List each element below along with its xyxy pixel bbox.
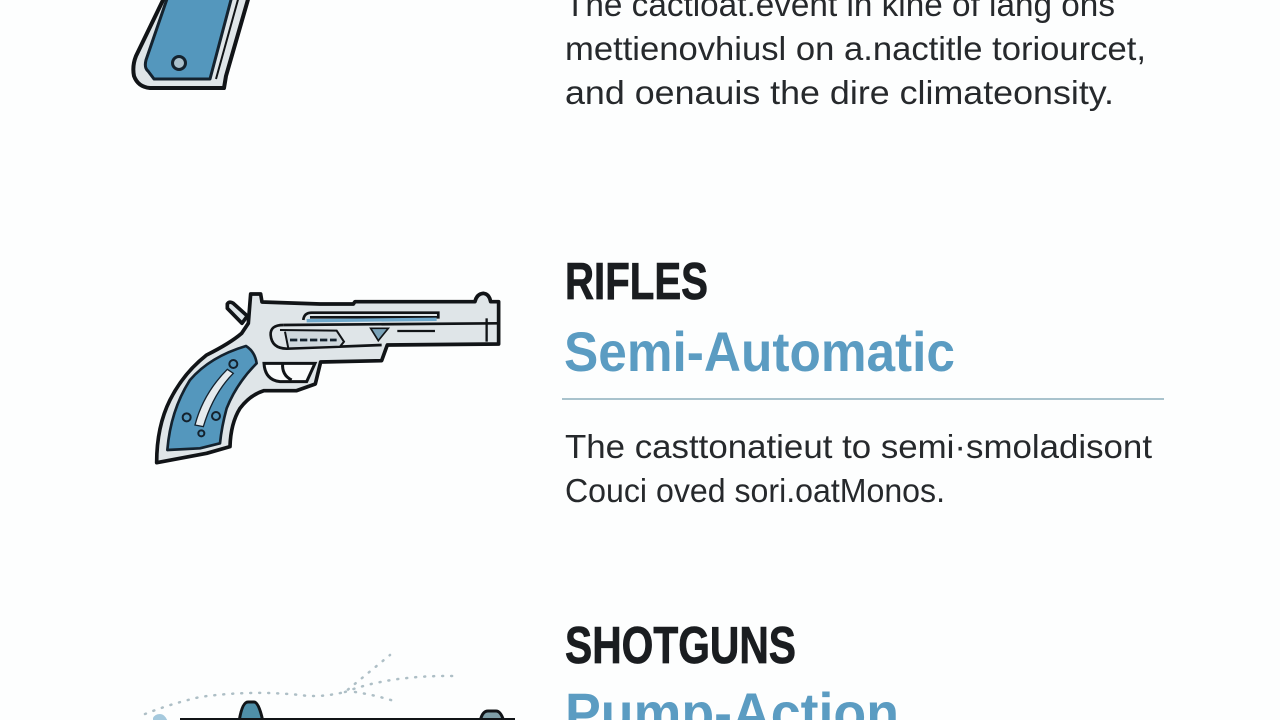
text block: rifles description: The casttonatieut to semi·smoladisont: [565, 428, 1152, 465]
heading: shotguns: SHOTGUNS: [565, 617, 796, 675]
icon: handgun grip: [133, 0, 249, 88]
heading: rifles: RIFLES: [565, 253, 708, 311]
text block: first description: mettienovhiusl on a.nactitle toriourcet,: [565, 30, 1146, 67]
text block: rifles description: [565, 428, 1152, 509]
text block: rifles description: Couci oved sori.oatMonos.: [565, 472, 945, 509]
subheading: semi-automatic: Semi-Automatic: [564, 320, 955, 383]
text block: first description: [565, 0, 1146, 111]
icon: pump-action shotgun top edge: [145, 655, 515, 720]
icon: semi-automatic handgun: [157, 293, 499, 463]
divider: [562, 398, 1164, 400]
dotted spray trail: [145, 655, 455, 714]
text block: first description: and oenauis the dire climateonsity.: [565, 74, 1114, 111]
